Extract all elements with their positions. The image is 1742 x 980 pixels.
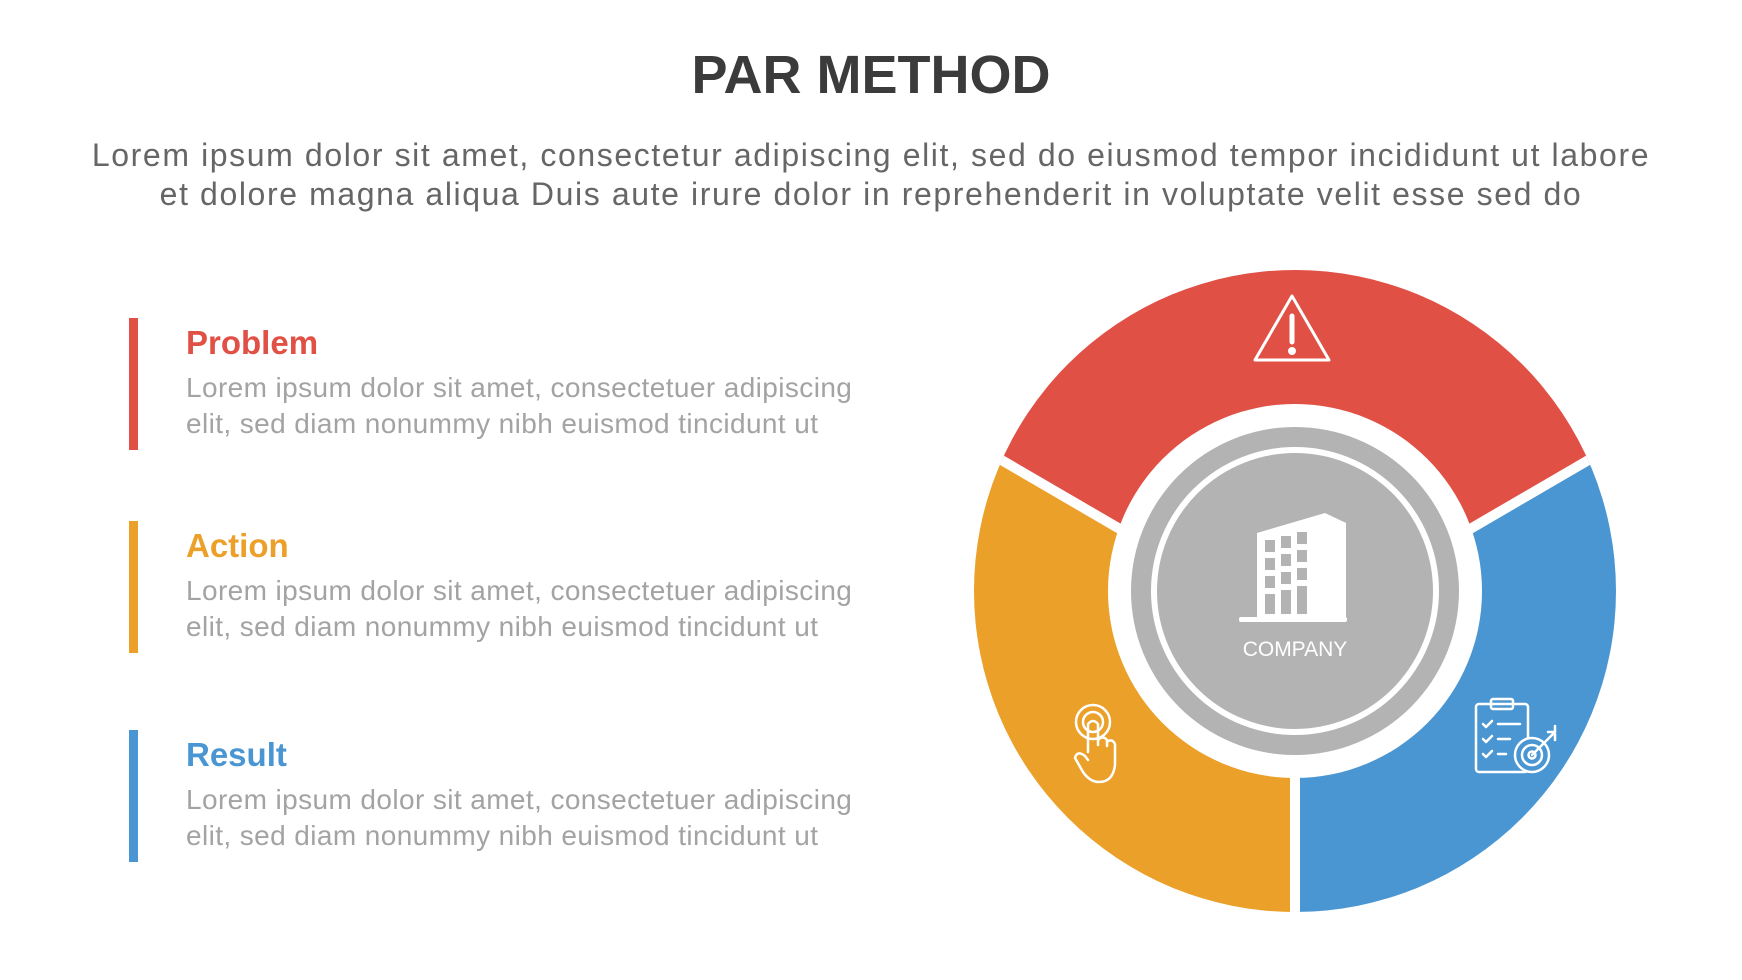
icon: hand tap [1075, 705, 1115, 782]
item: action: Action [186, 527, 289, 564]
item: result [129, 730, 852, 862]
item: problem: Lorem ipsum dolor sit amet, consectetuer adipiscing [186, 372, 852, 403]
item: action: Lorem ipsum dolor sit amet, consectetuer adipiscing [186, 575, 852, 606]
subtitle [92, 137, 1650, 212]
item: result: Result [186, 736, 287, 773]
item: action: elit, sed diam nonummy nibh euismod tincidunt ut [186, 611, 818, 642]
icon: warning [1255, 296, 1329, 360]
item: problem: Problem [186, 324, 318, 361]
item: action [129, 521, 852, 653]
circle diagram [974, 270, 1616, 912]
icon: clipboard target [1476, 699, 1555, 772]
item: result: Lorem ipsum dolor sit amet, consectetuer adipiscing [186, 784, 852, 815]
item: problem: elit, sed diam nonummy nibh euismod tincidunt ut [186, 408, 818, 439]
item: problem [129, 318, 852, 450]
icon: building [1239, 513, 1347, 622]
title: PAR METHOD [692, 45, 1050, 105]
subtitle: et dolore magna aliqua Duis aute irure dolor in reprehenderit in voluptate velit esse sed do [160, 176, 1582, 212]
company label: COMPANY [1243, 638, 1347, 661]
subtitle: Lorem ipsum dolor sit amet, consectetur adipiscing elit, sed do eiusmod tempor incididunt ut labore [92, 137, 1650, 173]
item: result: elit, sed diam nonummy nibh euismod tincidunt ut [186, 820, 818, 851]
